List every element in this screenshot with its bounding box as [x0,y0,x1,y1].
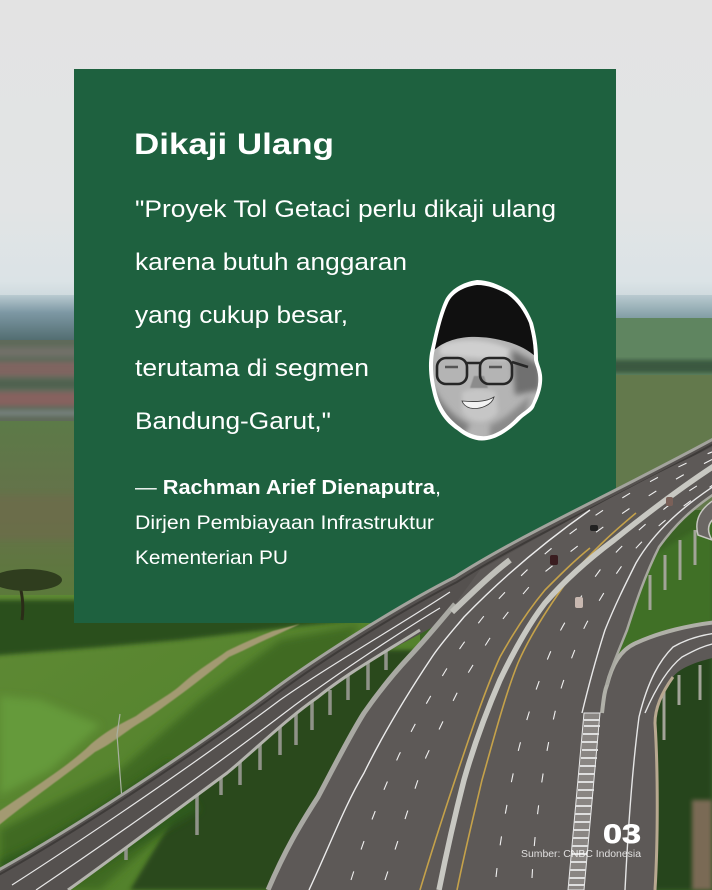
quote text: yang cukup besar, [135,302,348,329]
attribution: — Rachman Arief Dienaputra , [135,477,441,499]
far right ramp [697,498,712,540]
quote text: "Proyek Tol Getaci perlu dikaji ulang [135,196,556,223]
quote text: terutama di segmen [135,355,369,382]
background: sky [0,0,712,296]
gore hatched strip [568,713,600,890]
merge hatch upper [452,560,510,612]
background: landscape [0,295,712,890]
portrait: sticker head [425,280,545,445]
lamp post [117,714,122,800]
attribution: Kementerian PU [135,548,288,569]
dirt path [0,624,300,826]
ramp pillars [126,645,386,860]
source: Sumber: CNBC Indonesia [521,849,641,860]
main carriageway [268,445,712,890]
attribution: Dirjen Pembiayaan Infrastruktur [135,513,435,534]
right ramp pillars [650,530,700,740]
left ramp barrier [0,437,712,872]
portrait glasses [437,358,528,384]
right ramp lanes [625,633,712,890]
portrait hat [432,284,536,357]
cars [550,497,673,608]
portrait eyes [445,366,502,368]
page number: 03 [603,819,641,849]
quote text [135,196,556,435]
lane dashes [351,450,712,880]
panel: quote [74,69,616,623]
attribution [135,477,441,569]
quote text: karena butuh anggaran [135,249,407,276]
main right barrier [607,492,712,685]
right ramp outer barrier [602,622,712,713]
tree [0,569,62,620]
left edge line [309,510,590,890]
portrait face [433,285,538,436]
left ramp lower barrier [68,630,420,890]
right ramp edge [655,677,673,890]
heading: Dikaji Ulang [134,128,334,161]
quote text: Bandung-Garut," [135,408,331,435]
median barrier [439,464,712,890]
left ramp road [0,437,712,890]
main left barrier [268,604,455,890]
left ramp lane lines [12,592,450,890]
gold lines [420,513,636,890]
portrait smile [462,397,494,408]
right edge line [582,484,712,713]
portrait outline [429,280,542,441]
